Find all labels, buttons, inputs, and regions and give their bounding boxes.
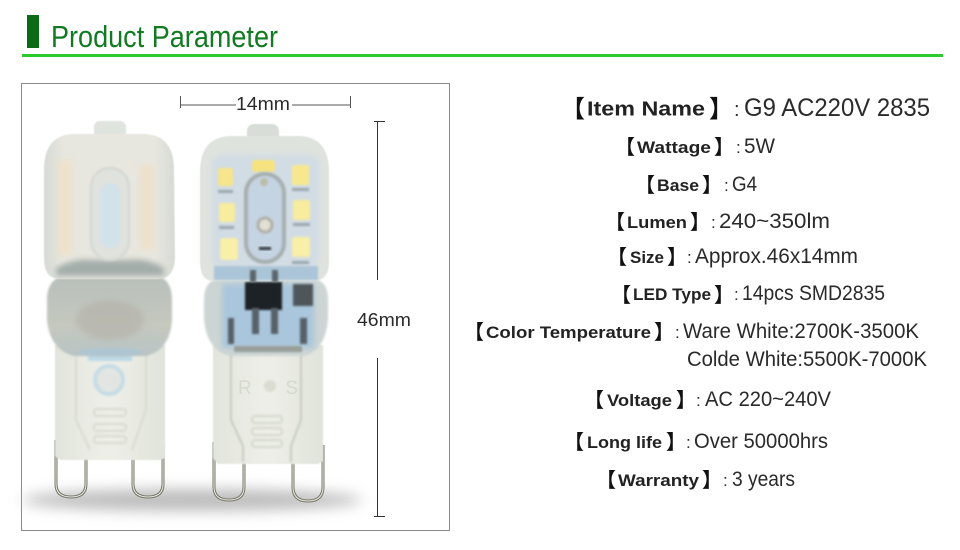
spec: lumen: 】 [690,206,710,235]
spec: voltage: AC 220~240V [705,388,831,411]
spec: led type: 【 [611,279,631,308]
bulb: frosted cover [44,121,175,497]
spec: lumen: 【 [605,206,625,235]
base [213,345,323,464]
spec: item name [561,89,930,124]
spec: item name: 】 [709,89,733,124]
spec: wattage: Wattage [637,138,711,157]
upper body [44,134,175,279]
spec: color temperature: : [675,323,680,342]
spec: color temperature: 】 [654,316,674,345]
spec: item name: G9 AC220V 2835 [744,94,930,122]
spec: base: G4 [732,173,757,196]
width dimension [180,93,350,114]
spec: long life: Long life [587,433,662,452]
spec: base [635,169,757,198]
spec: voltage: : [696,391,701,410]
spec: warranty: 】 [702,464,722,493]
spec: base: 】 [702,169,722,198]
spec: voltage: Voltage [607,391,672,410]
spec: wattage: 5W [744,135,775,158]
spec: color temperature [464,316,927,371]
LEDs [218,160,310,260]
spec: wattage: : [736,138,741,157]
LED pads [218,188,310,264]
spec: voltage: 】 [676,384,696,413]
spec: item name: Item Name [587,98,705,120]
pins [56,440,163,497]
spec: long life: 【 [564,426,584,455]
nub [247,124,279,142]
title underline [22,54,943,57]
spec: wattage [615,131,775,160]
panel: product photo [22,84,450,530]
height dimension [357,121,411,516]
spec: led type: LED Type [633,285,711,304]
spec: base: Base [657,176,699,195]
spec: led type: 14pcs SMD2835 [742,282,885,305]
spec: color temperature: 【 [464,316,484,345]
spec: size: 】 [667,241,687,270]
waist [47,278,172,356]
spec: size: 【 [607,241,627,270]
base marking: R S [238,378,298,399]
spec: size: : [687,248,692,267]
floor shadow [22,489,362,511]
lens window [246,174,284,262]
spec: long life [564,426,828,455]
spec: led type: 】 [714,279,734,308]
spec: voltage: 【 [584,384,604,413]
spec: size: Approx.46x14mm [695,245,858,268]
spec: lumen: : [711,213,716,232]
lens window [91,168,129,260]
spec: color temperature: Ware White:2700K-3500K [683,320,919,343]
spec: warranty: : [723,471,728,490]
spec: led type [611,279,885,308]
spec: lumen [605,206,830,235]
spec: lumen: Lumen [627,213,687,232]
spec: wattage: 】 [714,131,734,160]
pins [214,442,323,501]
spec: base: : [724,176,729,195]
spec: voltage [584,384,831,413]
spec: warranty: 【 [596,464,616,493]
title accent bar [27,15,39,48]
spec: long life: Over 50000hrs [694,430,828,453]
spec: long life: : [686,433,691,452]
spec: warranty: Warranty [618,471,700,490]
title: Product Parameter [51,19,278,54]
nub [94,121,126,139]
spec: item name: 【 [561,89,585,124]
base [55,345,165,460]
upper body [200,136,329,281]
spec: color temperature: Color Temperature [486,323,651,342]
spec: size: Size [630,248,664,267]
spec: size [607,241,858,270]
bulb: clear cover with LEDs [200,124,329,501]
spec: warranty: 3 years [732,468,795,491]
spec: wattage: 【 [615,131,635,160]
spec: warranty [596,464,795,493]
spec: lumen: 240~350lm [719,210,830,233]
waist [204,280,328,356]
width dimension: 14mm [236,93,290,114]
height dimension: 46mm [357,309,411,330]
spec: base: 【 [635,169,655,198]
spec: item name: : [734,99,740,121]
spec: color temperature: Colde White:5500K-7000K [687,348,927,371]
spec: long life: 】 [666,426,686,455]
spec: led type: : [734,285,739,304]
